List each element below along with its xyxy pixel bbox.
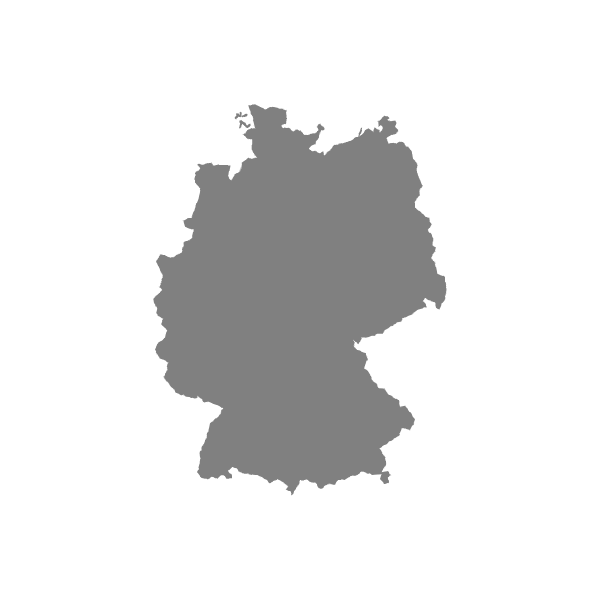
mainland silhouette: [153, 104, 447, 495]
North Sea islands: [236, 113, 250, 127]
